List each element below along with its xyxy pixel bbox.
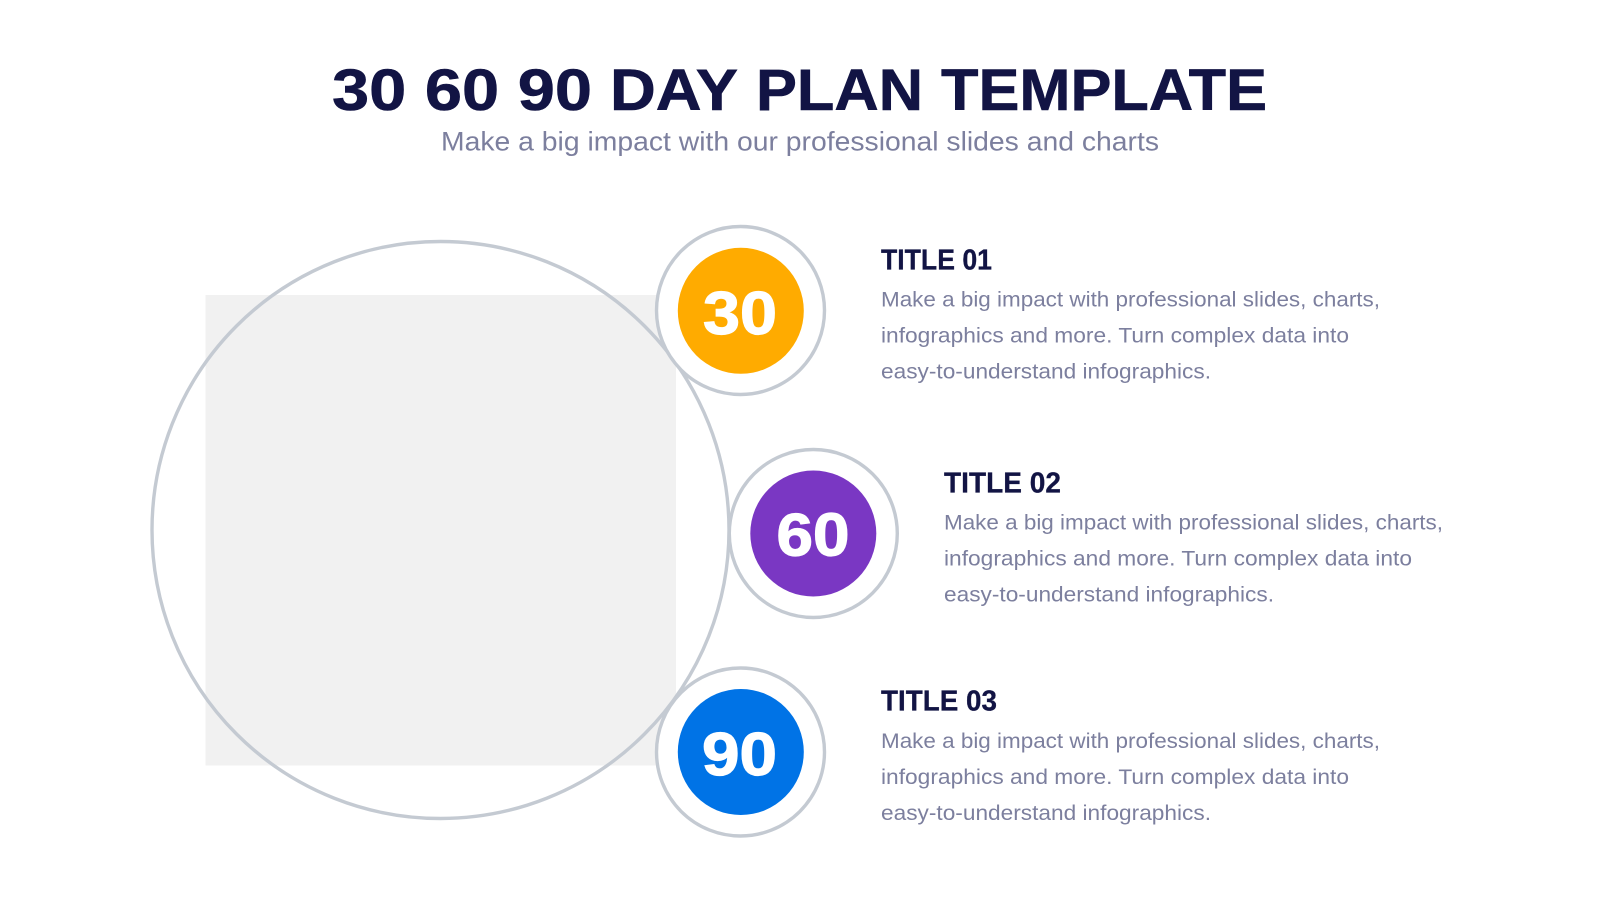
text block 3: infographics and more. Turn complex data into bbox=[881, 765, 1349, 789]
text block 2 bbox=[944, 468, 1443, 606]
item 1: 30 days bbox=[656, 226, 1380, 394]
title: DAY bbox=[610, 58, 738, 123]
text block 2: infographics and more. Turn complex data into bbox=[944, 546, 1412, 570]
badge 30 bbox=[656, 226, 824, 394]
badge 30: 30 bbox=[703, 280, 777, 347]
image placeholder bbox=[206, 295, 676, 766]
text block 3: easy-to-understand infographics. bbox=[881, 801, 1211, 825]
text block 3 bbox=[881, 686, 1380, 825]
badge 60: 60 bbox=[776, 502, 850, 568]
large outline circle bbox=[152, 242, 729, 818]
item 3: 90 days bbox=[656, 668, 1380, 836]
text block 3: Make a big impact with professional slides, charts, bbox=[881, 729, 1380, 753]
title: TEMPLATE bbox=[941, 58, 1267, 123]
subtitle: Make a big impact with our professional slides and charts bbox=[441, 126, 1159, 156]
text block 1: easy-to-understand infographics. bbox=[881, 360, 1211, 384]
badge 90 bbox=[656, 668, 824, 836]
text block 3: TITLE 03 bbox=[881, 686, 997, 718]
text block 1 bbox=[881, 244, 1380, 384]
text block 1: infographics and more. Turn complex data into bbox=[881, 324, 1349, 348]
title: PLAN bbox=[756, 58, 923, 123]
title bbox=[332, 58, 1267, 123]
badge 90: 90 bbox=[702, 721, 777, 788]
text block 1: TITLE 01 bbox=[881, 244, 992, 276]
text block 2: Make a big impact with professional slides, charts, bbox=[944, 510, 1443, 534]
item 2: 60 days bbox=[729, 450, 1443, 618]
title: 30 60 90 bbox=[332, 58, 592, 123]
text block 1: Make a big impact with professional slides, charts, bbox=[881, 288, 1380, 312]
text block 2: easy-to-understand infographics. bbox=[944, 582, 1274, 606]
badge 60 bbox=[729, 450, 897, 618]
text block 2: TITLE 02 bbox=[944, 468, 1061, 500]
